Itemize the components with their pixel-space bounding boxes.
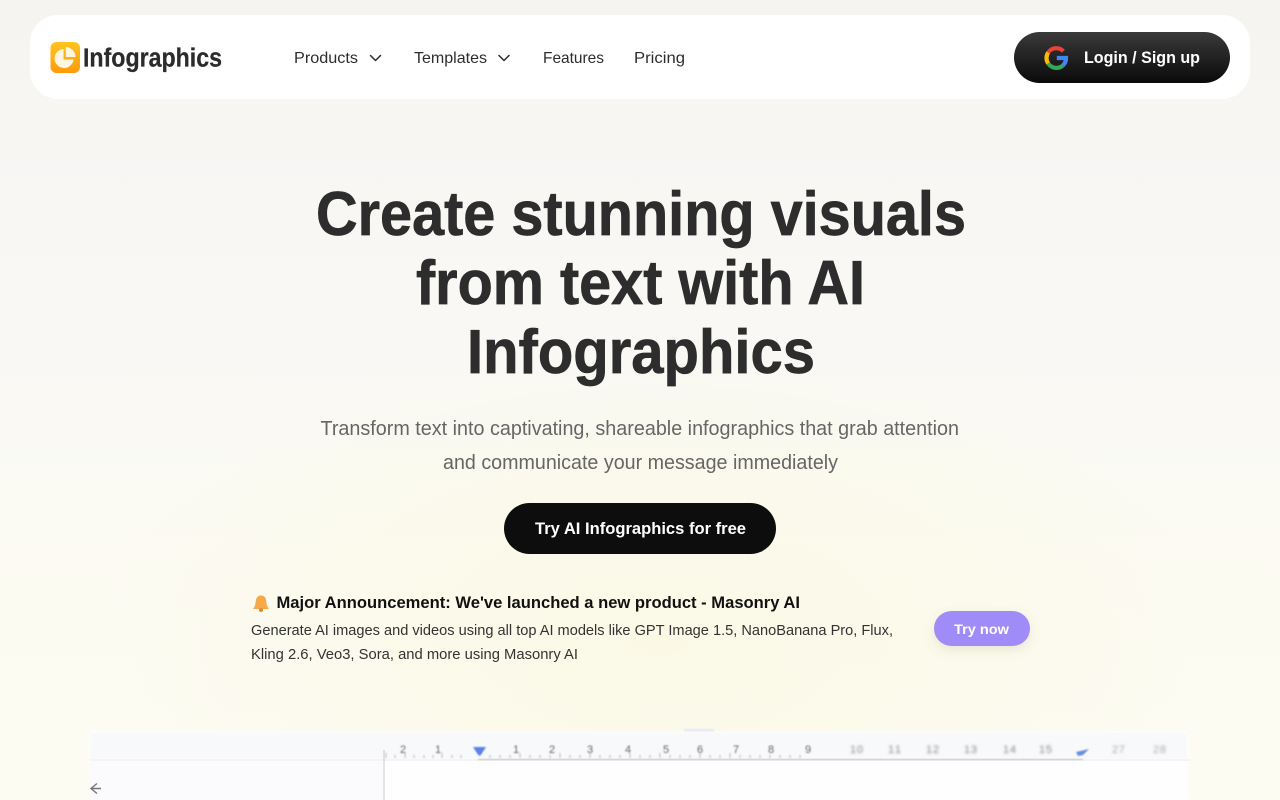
title: Infographics bbox=[467, 318, 815, 387]
ruler: 1 bbox=[513, 744, 519, 756]
button: try now bbox=[934, 611, 1030, 646]
ruler: 1 bbox=[435, 744, 441, 756]
button: login / sign up bbox=[1014, 32, 1230, 83]
title: Create stunning visuals bbox=[316, 180, 966, 249]
panel: product screenshot preview bbox=[90, 729, 1190, 800]
ruler: 5 bbox=[663, 744, 669, 756]
button: try for free bbox=[504, 503, 776, 554]
announcement body bbox=[251, 623, 893, 663]
icon: back arrow bbox=[91, 784, 101, 794]
button: try now: Try now bbox=[954, 621, 1009, 637]
icon: left indent marker bbox=[473, 747, 486, 756]
ruler: 11 bbox=[888, 744, 901, 756]
nav item: Templates: Templates bbox=[414, 50, 487, 67]
subtitle: and communicate your message immediately bbox=[443, 452, 838, 474]
button: login / sign up: Login / Sign up bbox=[1084, 49, 1200, 67]
icon: bell bbox=[253, 596, 269, 612]
ruler: 6 bbox=[697, 744, 703, 756]
ruler: 13 bbox=[964, 744, 977, 756]
nav item: Products: Products bbox=[294, 50, 358, 67]
ruler: 2 bbox=[400, 744, 406, 756]
announcement body: Kling 2.6, Veo3, Sora, and more using Masonry AI bbox=[251, 647, 578, 663]
ruler: 12 bbox=[926, 744, 939, 756]
announcement body: Generate AI images and videos using all top AI models like GPT Image 1.5, NanoBanana Pro, Flux, bbox=[251, 623, 893, 639]
ruler: 27 bbox=[1112, 744, 1125, 756]
subtitle: Transform text into captivating, shareable infographics that grab attention bbox=[320, 418, 959, 440]
ruler: 2 bbox=[549, 744, 555, 756]
ruler: 28 bbox=[1153, 744, 1166, 756]
button: try for free: Try AI Infographics for free bbox=[535, 520, 746, 538]
ruler: 3 bbox=[587, 744, 593, 756]
icon: right indent marker bbox=[1076, 749, 1089, 756]
left pane bbox=[90, 761, 383, 800]
logo wordmark: Infographics bbox=[83, 44, 222, 72]
ruler: 4 bbox=[625, 744, 631, 756]
toolbar strip bbox=[91, 733, 1187, 759]
ruler: 15 bbox=[1039, 744, 1052, 756]
panel: navigation bar bbox=[30, 15, 1250, 99]
title bbox=[316, 180, 966, 387]
ruler: 7 bbox=[733, 744, 739, 756]
ruler bbox=[386, 744, 1166, 760]
ruler: 10 bbox=[850, 744, 863, 756]
title: from text with AI bbox=[416, 249, 865, 318]
icon: Google G bbox=[1047, 48, 1066, 68]
panel: announcement bbox=[251, 594, 1030, 663]
nav item: Pricing: Pricing bbox=[634, 50, 685, 67]
ruler: 8 bbox=[768, 744, 774, 756]
icon: logo bbox=[50, 42, 80, 73]
ruler: 14 bbox=[1003, 744, 1016, 756]
ruler: 9 bbox=[805, 744, 811, 756]
nav item: Features: Features bbox=[543, 50, 604, 67]
announcement heading: Major Announcement: We've launched a new product - Masonry AI bbox=[276, 594, 800, 612]
subtitle bbox=[320, 418, 959, 474]
